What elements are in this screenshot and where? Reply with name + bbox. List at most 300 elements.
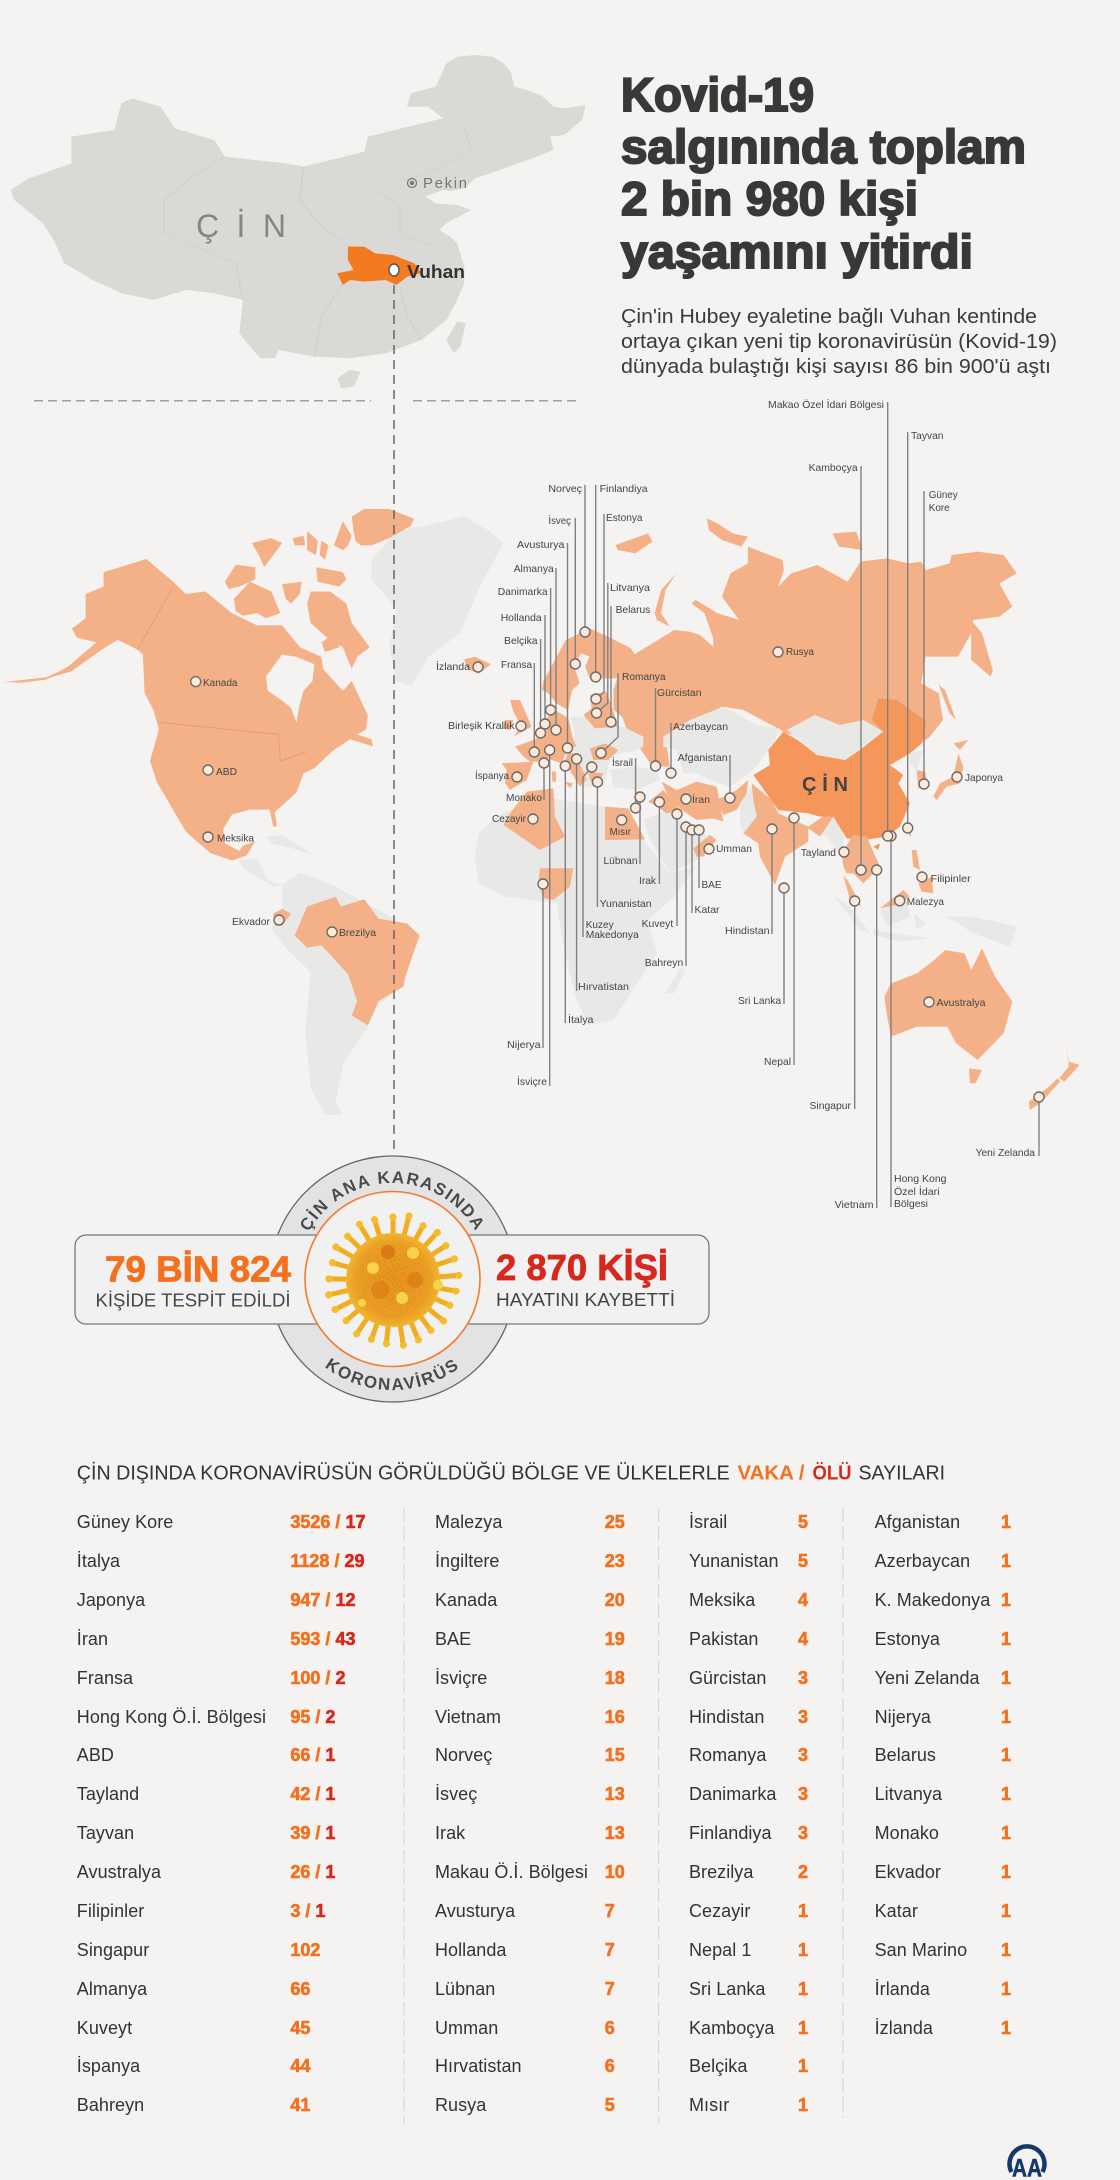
row: İspanya: İspanya [77, 2056, 141, 2076]
map region: Europe, Middle East, North Africa [502, 692, 780, 900]
pin: Belçika: Belçika [504, 635, 538, 647]
pin: Fransa [501, 659, 539, 757]
row: Azerbaycan: Azerbaycan [875, 1551, 970, 1571]
country pins and labels [191, 398, 1044, 1211]
row: Bahreyn [77, 2095, 310, 2115]
row: Kuveyt [77, 2018, 310, 2038]
row: Vietnam: 16 [605, 1707, 625, 1727]
map: China with Hubei highlighted [11, 55, 586, 388]
row: İrlanda: 1 [1001, 1979, 1011, 1999]
pin: Litvanya: Litvanya [610, 582, 650, 594]
pin: Romanya [596, 671, 666, 758]
pin: Lübnan: Lübnan [604, 855, 638, 867]
row: Tayvan: 39 / 1 [290, 1823, 335, 1843]
pin: Hollanda: Hollanda [501, 612, 542, 624]
row: Romanya: 3 [798, 1745, 808, 1765]
row: Kanada: 20 [605, 1590, 625, 1610]
row: Nepal: 1 [798, 1940, 808, 1960]
table column 3 [689, 1512, 808, 2115]
pin: BAE [694, 825, 722, 891]
pin: ABD [203, 765, 237, 778]
row: Hırvatistan: 6 [605, 2056, 615, 2076]
subtitle text block: dünyada bulaştığı kişi sayısı 86 bin 900'ü aştı [621, 355, 1051, 378]
row: Ekvador [875, 1862, 1011, 1882]
row: Rusya: Rusya [435, 2095, 487, 2115]
row: Tayland: Tayland [77, 1784, 139, 1804]
row: Pakistan: 4 [798, 1629, 808, 1649]
row: İtalya: İtalya [77, 1551, 121, 1571]
row: Avustralya [77, 1862, 335, 1882]
row: Nijerya: Nijerya [875, 1707, 932, 1727]
row: Japonya [77, 1590, 355, 1610]
row: Kanada: Kanada [435, 1590, 498, 1610]
pin: Estonya [591, 512, 643, 704]
pin: Yunanistan: Yunanistan [600, 898, 652, 910]
row: İran [77, 1629, 355, 1649]
row: Monako [875, 1823, 1011, 1843]
pin: Kamboçya: Kamboçya [809, 462, 858, 474]
row: İsviçre [435, 1668, 625, 1688]
pin: İsrail [612, 756, 641, 813]
row: Hindistan: 3 [798, 1707, 808, 1727]
row: Finlandiya: Finlandiya [689, 1823, 772, 1843]
pin: Norveç [548, 483, 590, 637]
row: Tayland [77, 1784, 335, 1804]
section heading: table title: VAKA / [738, 1462, 805, 1484]
pin: Afganistan [678, 752, 735, 803]
pin: İran [681, 793, 710, 806]
pin: Güney Kore: Güney [929, 489, 958, 501]
row: Almanya: 66 [290, 1979, 310, 1999]
row: Norveç: Norveç [435, 1745, 492, 1765]
pin: Malezya: Malezya [907, 896, 944, 908]
pin: Nijerya [507, 879, 548, 1051]
row: Norveç: 15 [605, 1745, 625, 1765]
row: Nijerya [875, 1707, 1011, 1727]
row: Tayvan [77, 1823, 335, 1843]
stat: deaths [496, 1247, 675, 1310]
row: Hindistan: Hindistan [689, 1707, 764, 1727]
row: İsviçre: 18 [605, 1668, 625, 1688]
row: BAE [435, 1629, 625, 1649]
subtitle text block [621, 305, 1057, 378]
stats panel [75, 1235, 709, 1324]
stat: deaths: HAYATINI KAYBETTİ [496, 1290, 675, 1310]
stat: cases [96, 1249, 291, 1311]
pin: Rusya [773, 646, 814, 658]
row: İzlanda: 1 [1001, 2018, 1011, 2038]
row: Finlandiya [689, 1823, 808, 1843]
pin: İsviçre [517, 745, 555, 1088]
row: Romanya [689, 1745, 808, 1765]
row: Filipinler: 3 / 1 [290, 1901, 325, 1921]
row: İran: 593 / 43 [290, 1629, 355, 1649]
subtitle text block: ortaya çıkan yeni tip koronavirüsün (Kovid-19) [621, 330, 1057, 353]
row: Mısır [689, 2095, 808, 2115]
pin: ABD: ABD [216, 766, 237, 778]
row: Sri Lanka: Sri Lanka [689, 1979, 766, 1999]
pin: Singapur: Singapur [810, 1100, 851, 1112]
pin: İran: İran [692, 793, 710, 806]
row: Belçika: 1 [798, 2056, 808, 2076]
pin: Estonya: Estonya [606, 512, 643, 524]
row: Avustralya: 26 / 1 [290, 1862, 335, 1882]
row: Nepal: Nepal 1 [689, 1940, 751, 1960]
pin: Almanya [514, 563, 561, 735]
row: Finlandiya: 3 [798, 1823, 808, 1843]
pin: İsveç: İsveç [548, 514, 571, 527]
row: BAE: BAE [435, 1629, 471, 1649]
row: Brezilya: 2 [798, 1862, 808, 1882]
row: BAE: 19 [605, 1629, 625, 1649]
row: Sri Lanka: 1 [798, 1979, 808, 1999]
pin: Romanya: Romanya [622, 671, 666, 683]
pin: Hong Kong Özel İdari Bölgesi: Hong Kong [894, 1173, 947, 1185]
label: Pekin with capital marker: Pekin [423, 175, 467, 192]
pin: Afganistan: Afganistan [678, 752, 728, 764]
curved text: Koronavirüs: KORONAVİRÜS [325, 1358, 458, 1390]
row: Japonya: Japonya [77, 1590, 146, 1610]
row: İrlanda [875, 1979, 1011, 1999]
row: Umman: Umman [435, 2018, 498, 2038]
row: Litvanya: 1 [1001, 1784, 1011, 1804]
pin: Japonya: Japonya [965, 772, 1003, 784]
row: Makau: 10 [605, 1862, 625, 1882]
pin: Fransa: Fransa [501, 659, 532, 671]
row: San Marino [875, 1940, 1011, 1960]
pin: Katar [687, 825, 720, 916]
row: Bahreyn: Bahreyn [77, 2095, 144, 2115]
row: İspanya [77, 2056, 310, 2076]
pin: Kuveyt [642, 809, 682, 930]
row: Yeni Zelanda: 1 [1001, 1668, 1011, 1688]
row: Hindistan [689, 1707, 808, 1727]
pin: Kanada: Kanada [203, 677, 238, 689]
row: Azerbaycan: 1 [1001, 1551, 1011, 1571]
pin: Hindistan [725, 824, 777, 937]
pin: Mısır [610, 815, 631, 838]
pin: Belarus: Belarus [616, 604, 650, 616]
dashed column dividers [404, 1508, 843, 2124]
pin: Kuzey Makedonya [583, 762, 639, 941]
pin: İspanya: İspanya [475, 769, 509, 782]
row: K. Makedonya: 1 [1001, 1590, 1011, 1610]
pin: Danimarka: Danimarka [498, 586, 548, 598]
pin: Avusturya [517, 539, 572, 753]
row: İtalya: 1128 / 29 [290, 1551, 364, 1571]
stat: cases: KİŞİDE TESPİT EDİLDİ [96, 1291, 290, 1311]
section heading: table title: SAYILARI [858, 1462, 945, 1484]
row: Singapur [77, 1940, 320, 1960]
pin: Bahreyn [645, 822, 691, 969]
row: Avusturya [435, 1901, 615, 1921]
pin: Avusturya: Avusturya [517, 539, 565, 551]
pin: Irak: Irak [639, 875, 657, 887]
row: Pakistan [689, 1629, 808, 1649]
pin: Hırvatistan: Hırvatistan [578, 981, 629, 993]
pin: İsrail: İsrail [612, 756, 633, 769]
row: Meksika: 4 [798, 1590, 808, 1610]
row: Lübnan: Lübnan [435, 1979, 495, 1999]
connector: dashed line from Vuhan to badge [393, 285, 395, 1150]
pin: Singapur [810, 896, 860, 1112]
logo: AA [1010, 2146, 1044, 2180]
row: Belçika: Belçika [689, 2056, 748, 2076]
row: Hollanda: 7 [605, 1940, 615, 1960]
row: Estonya [875, 1629, 1011, 1649]
pin: Azerbaycan: Azerbaycan [673, 721, 728, 733]
pin: Nepal: Nepal [764, 1056, 791, 1068]
row: Ekvador: 1 [1001, 1862, 1011, 1882]
row: Nijerya: 1 [1001, 1707, 1011, 1727]
row: Güney Kore [77, 1512, 365, 1532]
inner circle [305, 1192, 480, 1366]
row: Avustralya: Avustralya [77, 1862, 162, 1882]
row: Belarus [875, 1745, 1011, 1765]
title: Kovid-19 [621, 68, 814, 121]
pin: Kuzey Makedonya: Kuzey [586, 919, 614, 931]
row: Cezayir: Cezayir [689, 1901, 750, 1921]
row: İsveç: 13 [605, 1784, 625, 1804]
pin: İsveç [548, 514, 580, 669]
row: Kamboçya: Kamboçya [689, 2018, 775, 2038]
row: K. Makedonya: K. Makedonya [875, 1590, 991, 1610]
pin: Yeni Zelanda: Yeni Zelanda [976, 1147, 1035, 1159]
pin: Irak [639, 797, 664, 887]
row: Danimarka: Danimarka [689, 1784, 777, 1804]
row: Gürcistan [689, 1668, 808, 1688]
row: Meksika: Meksika [689, 1590, 756, 1610]
world map [4, 509, 1080, 1115]
row: Katar: Katar [875, 1901, 918, 1921]
row: Irak: Irak [435, 1823, 466, 1843]
pin: Sri Lanka: Sri Lanka [738, 995, 781, 1007]
row: Gürcistan: Gürcistan [689, 1668, 766, 1688]
row: İsveç: İsveç [435, 1784, 477, 1804]
pin: Tayvan [903, 430, 944, 833]
row: Monako: Monako [875, 1823, 939, 1843]
row: Avusturya: Avusturya [435, 1901, 516, 1921]
pin: Brezilya: Brezilya [339, 927, 376, 939]
pin: İzlanda: İzlanda [436, 660, 470, 673]
row: Hırvatistan: Hırvatistan [435, 2056, 522, 2076]
pin: Filipinler [917, 872, 971, 885]
pin: Katar: Katar [694, 904, 720, 916]
row: Romanya: Romanya [689, 1745, 767, 1765]
row: San Marino: San Marino [875, 1940, 967, 1960]
row: Belarus: Belarus [875, 1745, 936, 1765]
row: Tayvan: Tayvan [77, 1823, 134, 1843]
row: Belarus: 1 [1001, 1745, 1011, 1765]
row: Lübnan: 7 [605, 1979, 615, 1999]
row: Almanya: Almanya [77, 1979, 148, 1999]
pin: İtalya: İtalya [568, 1013, 594, 1026]
row: İzlanda: İzlanda [875, 2018, 934, 2038]
row: Rusya: 5 [605, 2095, 615, 2115]
pin: Sri Lanka [738, 883, 789, 1007]
row: San Marino: 1 [1001, 1940, 1011, 1960]
row: Estonya: Estonya [875, 1629, 941, 1649]
pin: Hindistan: Hindistan [725, 925, 770, 937]
pin: Filipinler: Filipinler [931, 873, 971, 885]
pin: Mısır: Mısır [610, 826, 631, 838]
pin: İsviçre: İsviçre [517, 1075, 547, 1088]
row: Gürcistan: 3 [798, 1668, 808, 1688]
row: İsrail: İsrail [689, 1512, 727, 1532]
pin: Kamboçya [809, 462, 866, 875]
pin: Finlandiya: Finlandiya [600, 483, 648, 495]
row: Nepal [689, 1940, 808, 1960]
pin: İzlanda [436, 660, 483, 673]
row: Mısır: 1 [798, 2095, 808, 2115]
pin: Lübnan [604, 792, 645, 867]
row: Umman [435, 2018, 615, 2038]
dashed separators [34, 400, 580, 402]
pin: Hong Kong Özel İdari Bölgesi: Bölgesi [894, 1198, 928, 1210]
row: Belçika [689, 2056, 808, 2076]
row: Fransa: 100 / 2 [290, 1668, 345, 1688]
row: Yunanistan: Yunanistan [689, 1551, 779, 1571]
table column 4 [875, 1512, 1011, 2038]
row: Brezilya: Brezilya [689, 1862, 754, 1882]
pin: Azerbaycan [666, 721, 728, 778]
pin: Finlandiya [591, 483, 648, 682]
row: Malezya [435, 1512, 625, 1532]
row: Katar: 1 [1001, 1901, 1011, 1921]
row: Bahreyn: 41 [290, 2095, 310, 2115]
row: Estonya: 1 [1001, 1629, 1011, 1649]
row: Tayland: 42 / 1 [290, 1784, 335, 1804]
row: İzlanda [875, 2018, 1011, 2038]
pin: Hong Kong Özel İdari Bölgesi: Özel İdari [894, 1185, 940, 1198]
row: Afganistan: Afganistan [875, 1512, 960, 1532]
row: Irak [435, 1823, 625, 1843]
pin: Litvanya [592, 582, 650, 718]
pin: Gürcistan: Gürcistan [657, 687, 702, 699]
row: Sri Lanka [689, 1979, 808, 1999]
pin: Vuhan: Vuhan [407, 262, 465, 282]
row: ABD [77, 1745, 335, 1765]
map region: Americas [4, 509, 504, 1115]
row: İngiltere: İngiltere [435, 1551, 500, 1571]
section heading: table title: ÇİN DIŞINDA KORONAVİRÜSÜN GÖRÜLDÜĞÜ BÖLGE VE ÜLKELERLE [77, 1461, 730, 1484]
pin: Danimarka [498, 586, 556, 715]
row: Japonya: 947 / 12 [290, 1590, 355, 1610]
pin: Kuzey Makedonya: Makedonya [586, 929, 639, 941]
pin: Tayland: Tayland [801, 847, 836, 859]
row: Fransa [77, 1668, 345, 1688]
row: İtalya [77, 1551, 364, 1571]
map region: Africa and Oceania [475, 797, 1080, 1110]
row: İspanya: 44 [290, 2056, 310, 2076]
map region: Asia with China [740, 698, 1017, 947]
China highlighted [753, 698, 927, 840]
row: İngiltere: 23 [605, 1551, 625, 1571]
row: Irak: 13 [605, 1823, 625, 1843]
row: Vietnam: Vietnam [435, 1707, 501, 1727]
title: salgınında toplam [621, 120, 1026, 173]
curved text: Çin ana karasında: ÇİN ANA KARASINDA [301, 1171, 483, 1230]
row: Malezya: 25 [605, 1512, 625, 1532]
row: Monako: 1 [1001, 1823, 1011, 1843]
pin: Yunanistan [592, 777, 652, 910]
table column 1 [77, 1512, 365, 2115]
row: Kanada [435, 1590, 625, 1610]
stat: deaths: 2 870 KİŞİ [496, 1247, 668, 1288]
pin: Yeni Zelanda [976, 1092, 1044, 1159]
pin: Kuveyt: Kuveyt [642, 918, 673, 930]
row: Kuveyt: Kuveyt [77, 2018, 132, 2038]
pin: Hong Kong Özel İdari Bölgesi [891, 841, 947, 1210]
row: Avusturya: 7 [605, 1901, 615, 1921]
row: İran: İran [77, 1629, 108, 1649]
subtitle text block: Çin'in Hubey eyaletine bağlı Vuhan kentinde [621, 305, 1037, 328]
row: İsrail [689, 1512, 808, 1532]
row: İsveç [435, 1784, 625, 1804]
pin: Meksika: Meksika [217, 832, 254, 844]
pin: Bahreyn: Bahreyn [645, 957, 683, 969]
icon: Hubei province [337, 247, 421, 285]
pin: Almanya: Almanya [514, 563, 554, 575]
pin: Tayvan: Tayvan [911, 430, 944, 442]
row: Malezya: Malezya [435, 1512, 503, 1532]
row: Danimarka: 3 [798, 1784, 808, 1804]
pin: Avustralya: Avustralya [936, 997, 986, 1009]
label: Çin: Ç İ N [196, 208, 286, 244]
pin: İtalya [560, 761, 594, 1026]
pin: Ekvador: Ekvador [232, 916, 270, 928]
row: Vietnam [435, 1707, 625, 1727]
row: Katar [875, 1901, 1011, 1921]
row: Güney Kore: 3526 / 17 [290, 1512, 365, 1532]
row: Makau: Makau Ö.İ. Bölgesi [435, 1862, 588, 1882]
row: Yunanistan: 5 [798, 1551, 808, 1571]
title [621, 68, 1026, 278]
stat: cases: 79 BİN 824 [105, 1249, 291, 1290]
row: İngiltere [435, 1551, 625, 1571]
outer ring [270, 1156, 516, 1402]
section heading: table title: ÖLÜ [812, 1461, 852, 1484]
row: Singapur: 102 [290, 1940, 320, 1960]
row: Hollanda [435, 1940, 615, 1960]
row: Cezayir [689, 1901, 808, 1921]
pin: Güney Kore: Kore [929, 502, 950, 514]
icon: coronavirus [324, 1212, 463, 1349]
row: Yeni Zelanda: Yeni Zelanda [875, 1668, 981, 1688]
row: Kuveyt: 45 [290, 2018, 310, 2038]
pin: Monako: Monako [506, 792, 542, 804]
pin: Nepal [764, 813, 799, 1068]
row: Cezayir: 1 [798, 1901, 808, 1921]
pin: Norveç: Norveç [548, 483, 582, 495]
row: Kamboçya: 1 [798, 2018, 808, 2038]
row: Norveç [435, 1745, 625, 1765]
pin: Makao Özel İdari Bölgesi [768, 398, 896, 841]
pin: Makao Özel İdari Bölgesi: Makao Özel İdari Bölgesi [768, 398, 884, 411]
title: yaşamını yitirdi [621, 225, 973, 278]
table column 2 [435, 1512, 625, 2115]
pin: Meksika [203, 832, 254, 844]
row: Hong Kong: 95 / 2 [290, 1707, 335, 1727]
pin: Belarus [606, 604, 650, 727]
row: Litvanya [875, 1784, 1011, 1804]
pin: Ekvador [232, 915, 284, 928]
pin: Birleşik Krallık: Birleşik Krallık [448, 720, 515, 732]
row: Filipinler: Filipinler [77, 1901, 144, 1921]
row: Litvanya: Litvanya [875, 1784, 943, 1804]
title: 2 bin 980 kişi [621, 172, 918, 225]
pin: Cezayir: Cezayir [492, 813, 526, 825]
